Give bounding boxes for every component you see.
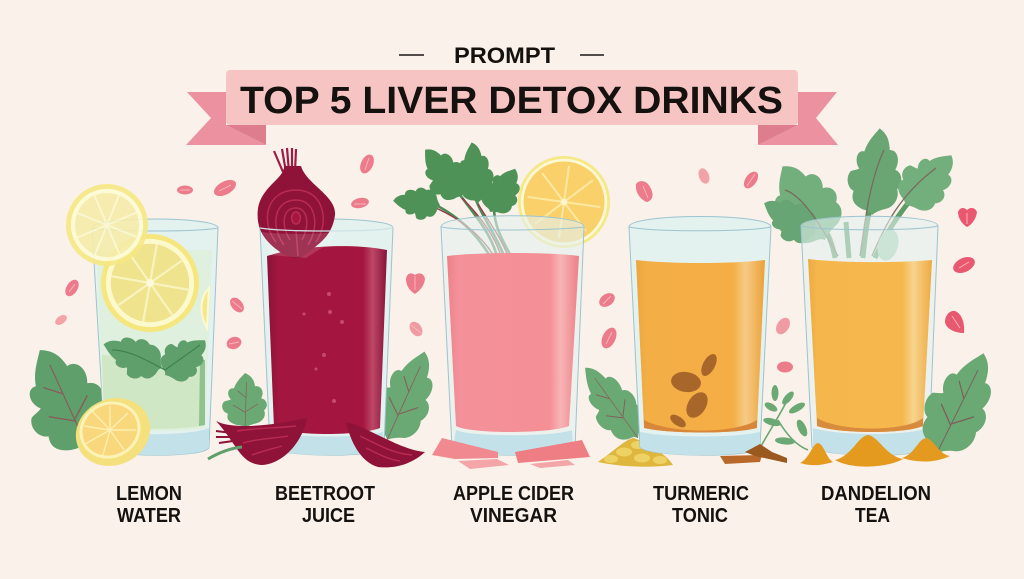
ACV stems and leaves <box>392 138 531 256</box>
label: lemon water: LEMON <box>116 483 182 505</box>
floating petals <box>53 152 977 372</box>
label: turmeric tonic: TURMERIC <box>653 483 749 505</box>
right leaf beside dandelion tea <box>908 340 1011 466</box>
glass: dandelion tea <box>801 216 938 455</box>
label: beetroot juice: JUICE <box>302 505 355 527</box>
glass: apple cider vinegar <box>441 216 584 455</box>
turmeric seeds <box>668 352 720 430</box>
label: apple cider vinegar: APPLE CIDER <box>453 483 574 505</box>
half lemon <box>65 386 161 478</box>
dandelion leaves <box>753 126 969 263</box>
seed pile <box>598 438 673 467</box>
small sprig <box>760 385 809 450</box>
label: beetroot juice: BEETROOT <box>275 483 375 505</box>
beetroot halves <box>208 418 425 467</box>
turmeric powder piles <box>800 435 950 467</box>
rhubarb pieces <box>432 438 590 469</box>
glass: beetroot juice <box>260 219 393 455</box>
cinnamon pieces <box>720 444 787 464</box>
left leaf behind lemon water <box>4 333 123 467</box>
lemon slices in lemon water <box>54 172 209 340</box>
mint leaves in lemon water <box>96 325 218 390</box>
glass rim over beetroot <box>260 228 393 258</box>
prompt heading: PROMPT <box>454 43 556 68</box>
glass: turmeric tonic <box>629 216 771 455</box>
whole beetroot <box>258 148 335 258</box>
glass: lemon water <box>92 219 218 455</box>
leaf beside turmeric glass <box>567 355 655 452</box>
right leaf beside beetroot glass <box>361 341 449 451</box>
label: dandelion tea: DANDELION <box>821 483 931 505</box>
lemon slice on ACV glass <box>512 150 616 254</box>
title banner <box>186 70 838 145</box>
small leaf behind beetroot glass <box>222 373 267 428</box>
label: lemon water: WATER <box>117 505 182 527</box>
title banner: TOP 5 LIVER DETOX DRINKS <box>240 80 783 122</box>
label: dandelion tea: TEA <box>855 505 890 527</box>
label: apple cider vinegar: VINEGAR <box>470 505 558 527</box>
label: turmeric tonic: TONIC <box>672 505 728 527</box>
